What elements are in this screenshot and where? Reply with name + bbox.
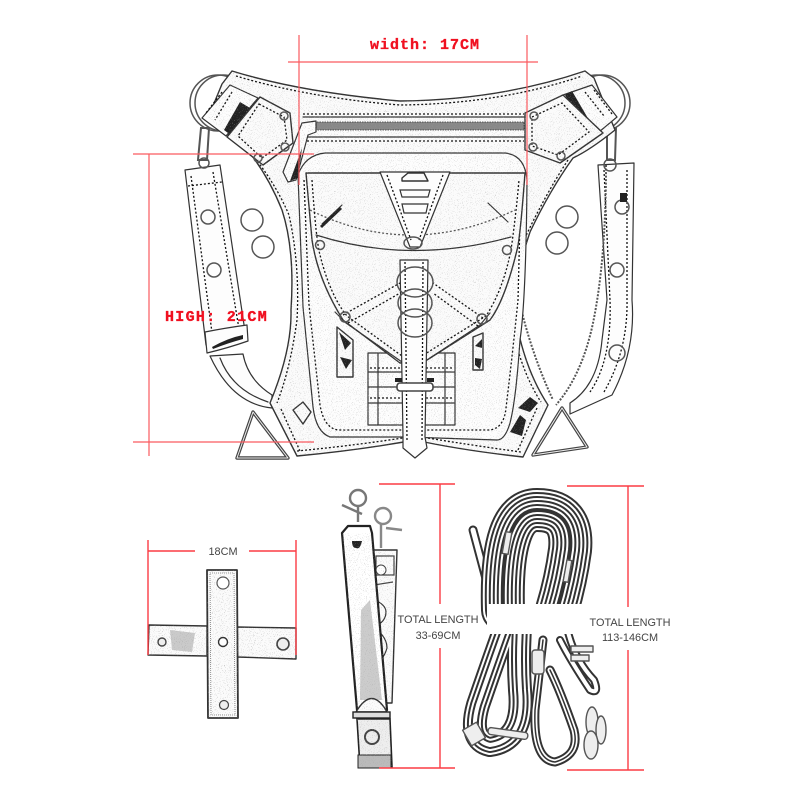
side rings — [190, 75, 630, 258]
upper arch bundle — [503, 510, 570, 610]
short strap dimension lines — [379, 484, 455, 768]
zipper — [283, 114, 524, 182]
front strap — [342, 526, 387, 710]
rivets — [158, 577, 289, 710]
18CM label: 18CM — [208, 546, 238, 558]
body stitching — [236, 76, 582, 452]
vertical strap — [207, 570, 238, 718]
flap stitching — [310, 180, 519, 362]
snap hooks — [198, 128, 616, 171]
leather speckle texture — [208, 72, 615, 456]
long strap label: TOTAL LENGTH — [590, 617, 670, 629]
right shoulder strap — [570, 163, 634, 414]
upper tab — [380, 172, 450, 249]
main bag illustration — [185, 60, 634, 460]
white paper band — [487, 604, 587, 634]
width label: width: 17CM — [370, 37, 480, 54]
D rings — [397, 267, 433, 337]
right pentagon panel — [525, 85, 617, 163]
long strap label: 113-146CM — [602, 632, 658, 644]
height dimension lines — [133, 154, 314, 456]
left shoulder strap — [185, 165, 272, 408]
right tail — [560, 632, 596, 691]
hardware — [463, 532, 606, 759]
lower center loop — [535, 640, 575, 762]
long strap dimension lines — [567, 486, 644, 770]
cross strap piece — [145, 568, 300, 720]
left tail — [473, 530, 493, 605]
buckle and tail — [353, 698, 392, 768]
pocket inner stitching — [304, 180, 521, 430]
back strap — [372, 550, 397, 703]
pocket flap — [306, 173, 525, 363]
height label: HIGH: 21CM — [165, 309, 268, 326]
metal studs — [293, 327, 538, 436]
center buckle strap — [395, 260, 434, 458]
bag body — [208, 71, 615, 457]
left pentagon panel — [202, 85, 293, 165]
triangle rings — [237, 408, 587, 458]
coiled long strap — [463, 510, 606, 762]
lower left loop bundle — [475, 628, 521, 745]
flap rivets — [316, 240, 512, 324]
lower straps block — [368, 353, 455, 425]
short strap label: 33-69CM — [416, 630, 460, 642]
18CM dimension lines — [148, 540, 296, 655]
width dimension lines — [288, 35, 538, 185]
short strap label: TOTAL LENGTH — [398, 614, 478, 626]
short strap texture — [342, 533, 397, 767]
clasps — [342, 490, 402, 548]
chain — [513, 165, 606, 405]
strap texture — [145, 568, 300, 720]
front pocket frame — [298, 153, 527, 440]
horizontal strap — [148, 625, 207, 656]
short straps with clasps — [340, 490, 402, 770]
